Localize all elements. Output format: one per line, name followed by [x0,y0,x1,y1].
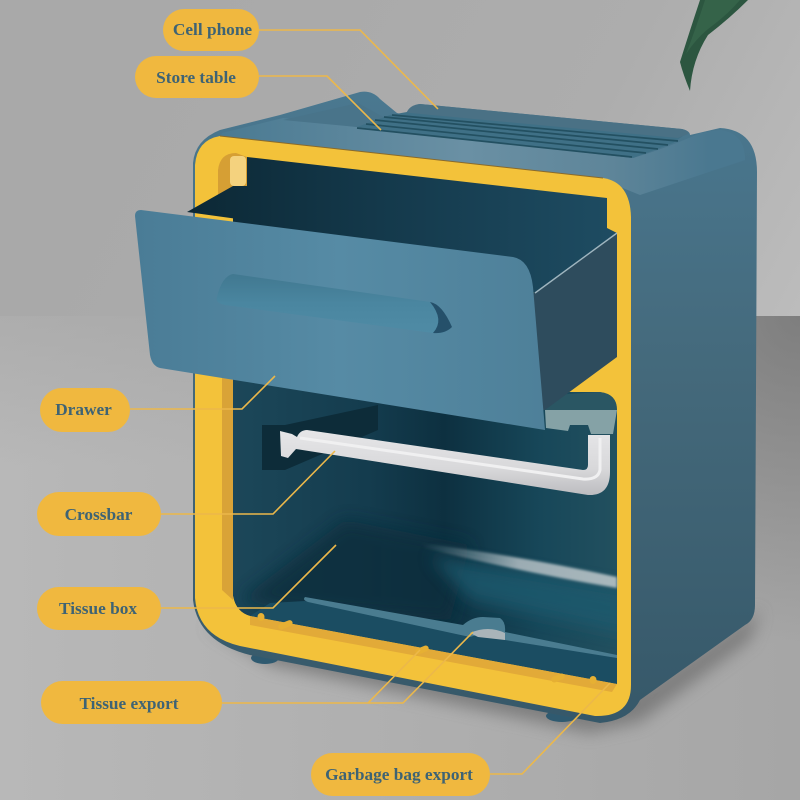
drawer interior [187,186,617,293]
yellow frame [195,136,631,716]
left lower frame shade [222,365,233,600]
drawer front [135,210,545,430]
crossbar [280,430,610,495]
label: Cell phone: Cell phone [173,20,252,39]
upper compartment interior [233,157,617,293]
organizer cabinet [135,92,757,723]
yellow frame edge [220,136,603,178]
floor [250,601,617,684]
label: Crossbar [37,492,161,536]
back wall band [434,554,617,628]
left tray recess [283,103,392,127]
frame recess [218,153,247,196]
label: Tissue box [37,587,161,630]
lower compartment interior [233,372,630,684]
label: Drawer: Drawer [55,400,112,419]
label: Tissue box: Tissue box [59,599,137,618]
leader lines [130,30,610,774]
label: Store table: Store table [156,68,236,87]
bottom frame tabs [258,613,596,684]
cabinet shadow [205,610,760,733]
lower dark zone [246,521,411,611]
store table ribs [357,112,687,158]
label: Tissue export: Tissue export [79,694,179,713]
drawer right side [528,233,617,410]
label: Garbage bag export [311,753,490,796]
label: Tissue export [41,681,222,724]
recess tab [230,156,246,186]
cabinet shell [193,92,757,723]
cell phone slot [407,104,688,138]
plant leaf [680,0,748,91]
tissue export slot [304,597,617,658]
drawer handle [217,274,452,333]
label: Drawer [40,388,130,432]
cabinet feet [251,652,578,722]
label: Cell phone [163,9,259,51]
back wall highlight [420,543,617,588]
label: Garbage bag export: Garbage bag export [325,765,473,784]
frame ledge [250,616,617,692]
label: Crossbar: Crossbar [65,505,133,524]
tissue box lid [545,410,617,434]
label: Store table [135,56,259,98]
top surface [220,118,745,195]
crossbar mount [262,405,378,470]
